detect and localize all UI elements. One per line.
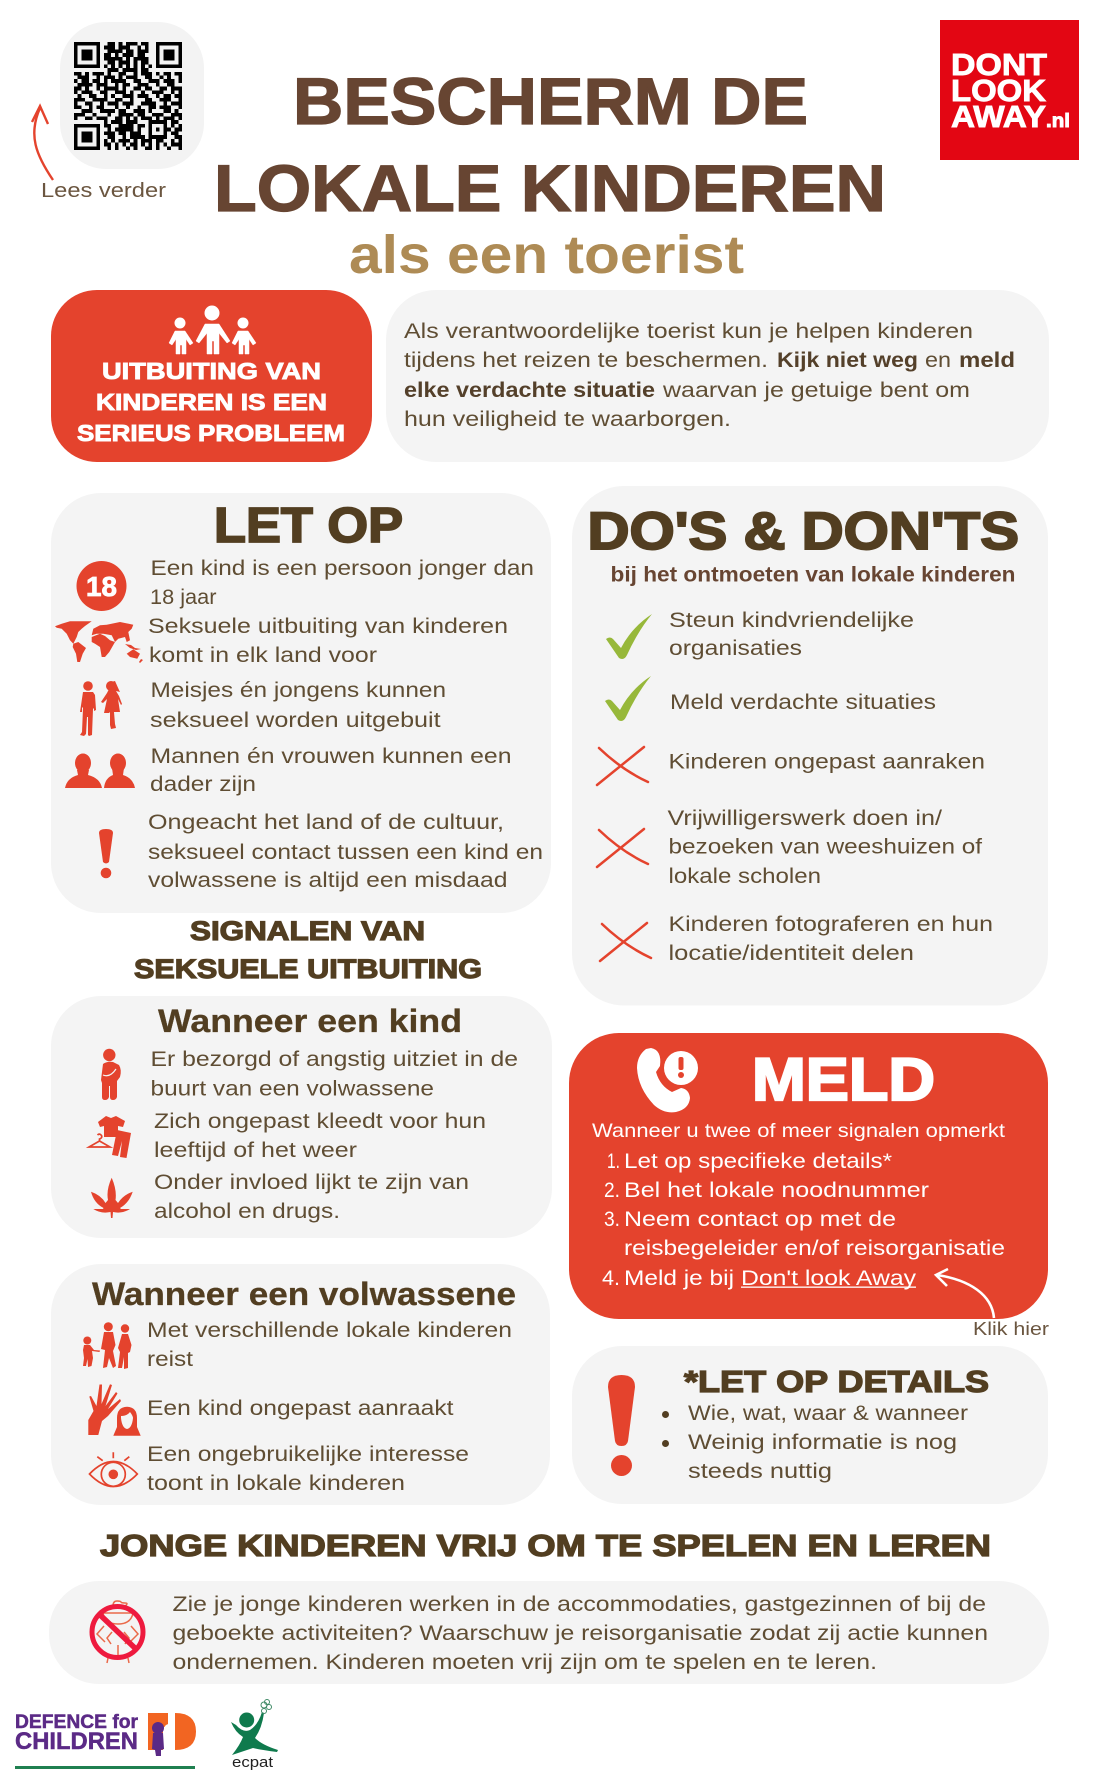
caption: klik hier: Klik hier [973, 1318, 1049, 1339]
text: girls and boys: Meisjes én jongens kunnen [150, 678, 446, 702]
text: anxious [150, 1047, 518, 1100]
intro text: Kijk niet weg [777, 348, 918, 372]
numbered steps: Neem contact op met de [624, 1207, 896, 1231]
heading: Wanneer een volwassene [92, 1276, 516, 1312]
intro text: tijdens het reizen te beschermen. [404, 348, 768, 372]
text: always a crime: seksueel contact tussen een kind en [148, 840, 543, 864]
logo: ecpat [231, 1700, 278, 1771]
panel: meld [569, 1033, 1048, 1319]
text: always a crime: Ongeacht het land of de cultuur, [148, 810, 504, 834]
numbered steps: 3. [604, 1207, 620, 1231]
icon: cross [597, 829, 648, 867]
text: travels with children: reist [147, 1347, 193, 1371]
bullet list: Wie, wat, waar & wanneer [688, 1401, 968, 1425]
icon: cross [597, 747, 648, 785]
intro text: Als verantwoordelijke toerist kun je helpen kinderen [404, 319, 973, 343]
text: always a crime: volwassene is altijd een misdaad [148, 868, 508, 892]
text: offenders: Mannen én vrouwen kunnen een [150, 744, 512, 768]
logo: Dont Look Away [940, 20, 1079, 160]
icon: cross [600, 923, 651, 961]
text: no photos: Kinderen fotograferen en hun [668, 912, 993, 936]
logo: Dont Look Away: DONT [951, 47, 1047, 82]
text: no touching: Kinderen ongepast aanraken [668, 750, 985, 774]
numbered steps [602, 1149, 1005, 1290]
icon: clothes [89, 1116, 131, 1158]
text: age: 18 jaar [150, 585, 216, 609]
text: age [150, 556, 534, 609]
panel heading [77, 358, 345, 446]
text: no photos [668, 912, 993, 965]
logo: Dont Look Away: LOOK [951, 73, 1047, 108]
text: no volunteering [668, 806, 982, 888]
text: clothes [154, 1109, 486, 1162]
text: report: Meld verdachte situaties [670, 690, 936, 714]
bullet list [662, 1401, 968, 1483]
numbered steps: Meld je bij [624, 1266, 734, 1290]
numbered steps: Bel het lokale noodnummer [624, 1178, 929, 1202]
icon: 18 [76, 561, 126, 611]
icon: anxious person [101, 1049, 121, 1100]
logo: Dont Look Away: AWAY [951, 99, 1046, 134]
text: warn organisation: ondernemen. Kinderen moeten vrij zijn om te spelen en te leren. [172, 1650, 877, 1674]
panel: child labour [49, 1581, 1049, 1684]
icon: adult with children [83, 1322, 132, 1369]
icon: girl and boy [80, 681, 122, 736]
logo: ecpat: ecpat [232, 1754, 274, 1771]
logo: Defence for Children: CHILDREN [15, 1728, 138, 1755]
text: offenders [150, 744, 512, 796]
bullet list: Weinig informatie is nog [688, 1430, 957, 1454]
panel: let op details [572, 1346, 1048, 1504]
intro text: elke verdachte situatie [404, 378, 655, 402]
intro text: waarvan je getuige bent om [662, 378, 970, 402]
title: LOKALE KINDEREN [214, 151, 886, 225]
text: clothes: Zich ongepast kleedt voor hun [154, 1109, 486, 1133]
text: always a crime [148, 810, 543, 892]
text: warn organisation: geboekte activiteiten? Waarschuw je reisorganisatie zodat zij actie kunnen [172, 1621, 988, 1645]
text: support [669, 608, 914, 660]
heading: let op: LET OP [214, 499, 403, 553]
caption: Lees verder: Lees verder [41, 180, 166, 202]
panel heading: SERIEUS PROBLEEM [77, 420, 345, 446]
heading: jonge kinderen: JONGE KINDEREN VRIJ OM TE SPELEN EN LEREN [100, 1528, 991, 1563]
text: support: organisaties [669, 636, 802, 660]
logo: Dont Look Away: .nl [1046, 111, 1070, 132]
panel: wanneer een kind [51, 996, 552, 1238]
text: interest: toont in lokale kinderen [147, 1471, 405, 1495]
icon: check [605, 676, 651, 721]
text: no volunteering: Vrijwilligerswerk doen in/ [668, 806, 942, 830]
numbered steps: 2. [604, 1178, 620, 1202]
icon: check [606, 614, 652, 659]
panel: let op [51, 493, 551, 913]
heading: DO'S & DON'TS [588, 502, 1019, 561]
intro text: meld [959, 348, 1015, 372]
intro text: en [925, 348, 951, 372]
text: drugs: alcohol en drugs. [154, 1199, 340, 1223]
heading: meld: MELD [752, 1046, 935, 1113]
text: when: Wanneer u twee of meer signalen opmerkt [592, 1120, 1006, 1142]
title: BESCHERM DE [293, 64, 808, 138]
icon: hand and child [88, 1384, 141, 1436]
panel heading: KINDEREN IS EEN [96, 389, 327, 415]
intro text [404, 319, 1015, 431]
heading: Wanneer een kind [158, 1003, 462, 1039]
logo: Defence for Children: DEFENCE for [15, 1712, 139, 1733]
icon: family [169, 306, 256, 354]
text: drugs: Onder invloed lijkt te zijn van [154, 1170, 469, 1194]
numbered steps: reisbegeleider en/of reisorganisatie [624, 1236, 1005, 1260]
heading: *LET OP DETAILS [684, 1364, 989, 1399]
numbered steps: 1. [607, 1149, 620, 1173]
text: interest [147, 1442, 469, 1495]
text: anxious: buurt van een volwassene [150, 1076, 434, 1100]
text: interest: Een ongebruikelijke interesse [147, 1442, 469, 1466]
icon: no child labour [92, 1601, 143, 1663]
text: no volunteering: lokale scholen [668, 864, 821, 888]
text: age: Een kind is een persoon jonger dan [150, 556, 534, 580]
title [214, 64, 886, 285]
text: travels with children: Met verschillende lokale kinderen [147, 1318, 512, 1342]
numbered steps: 4. [602, 1266, 620, 1290]
subtitle: als een toerist [349, 225, 744, 285]
arrow: to QR code [32, 106, 53, 180]
icon: world map [55, 621, 143, 663]
text: every country [148, 614, 508, 667]
icon: man and woman [65, 754, 135, 788]
heading: signalen [134, 916, 482, 984]
text: drugs [154, 1170, 469, 1223]
text: travels with children [147, 1318, 512, 1371]
text: every country: Seksuele uitbuiting van kinderen [148, 614, 508, 638]
numbered steps: Don't look Away [741, 1266, 916, 1290]
panel: do's and don'ts [572, 486, 1048, 1006]
heading: signalen: SIGNALEN VAN [190, 916, 425, 946]
text: warn organisation [172, 1592, 988, 1674]
heading: signalen: SEKSUELE UITBUITING [134, 954, 482, 984]
bullet list: steeds nuttig [688, 1459, 832, 1483]
text: girls and boys [150, 678, 446, 732]
text: every country: komt in elk land voor [149, 643, 377, 667]
panel: introduction [386, 290, 1049, 462]
text: offenders: dader zijn [150, 772, 256, 796]
panel heading: UITBUITING VAN [102, 358, 321, 384]
icon: cannabis leaf [91, 1178, 133, 1218]
text: no photos: locatie/identiteit delen [668, 941, 914, 965]
icon: QR code [74, 44, 182, 148]
arrow: to link [936, 1269, 994, 1318]
text: no volunteering: bezoeken van weeshuizen of [668, 834, 982, 858]
icon: exclamation mark [99, 829, 113, 878]
text: anxious: Er bezorgd of angstig uitziet in de [150, 1047, 518, 1071]
panel: serious problem [51, 290, 372, 462]
text: touches child: Een kind ongepast aanraakt [147, 1396, 454, 1420]
logo: Defence for Children [15, 1712, 196, 1769]
intro text: hun veiligheid te waarborgen. [404, 407, 731, 431]
icon: eye [90, 1452, 137, 1486]
text: warn organisation: Zie je jonge kinderen werken in de accommodaties, gastgezinnen of bij de [172, 1592, 986, 1616]
icon: 18: 18 [86, 571, 117, 602]
icon: phone alert [637, 1048, 698, 1112]
text: girls and boys: seksueel worden uitgebuit [150, 708, 441, 732]
numbered steps: Let op specifieke details* [624, 1149, 893, 1173]
panel: wanneer een volwassene [51, 1264, 550, 1505]
text: support: Steun kindvriendelijke [669, 608, 914, 632]
text: clothes: leeftijd of het weer [154, 1138, 357, 1162]
QR code block [60, 22, 204, 169]
icon: exclamation mark [608, 1375, 635, 1476]
subheading: bij het ontmoeten van lokale kinderen [610, 564, 1016, 586]
